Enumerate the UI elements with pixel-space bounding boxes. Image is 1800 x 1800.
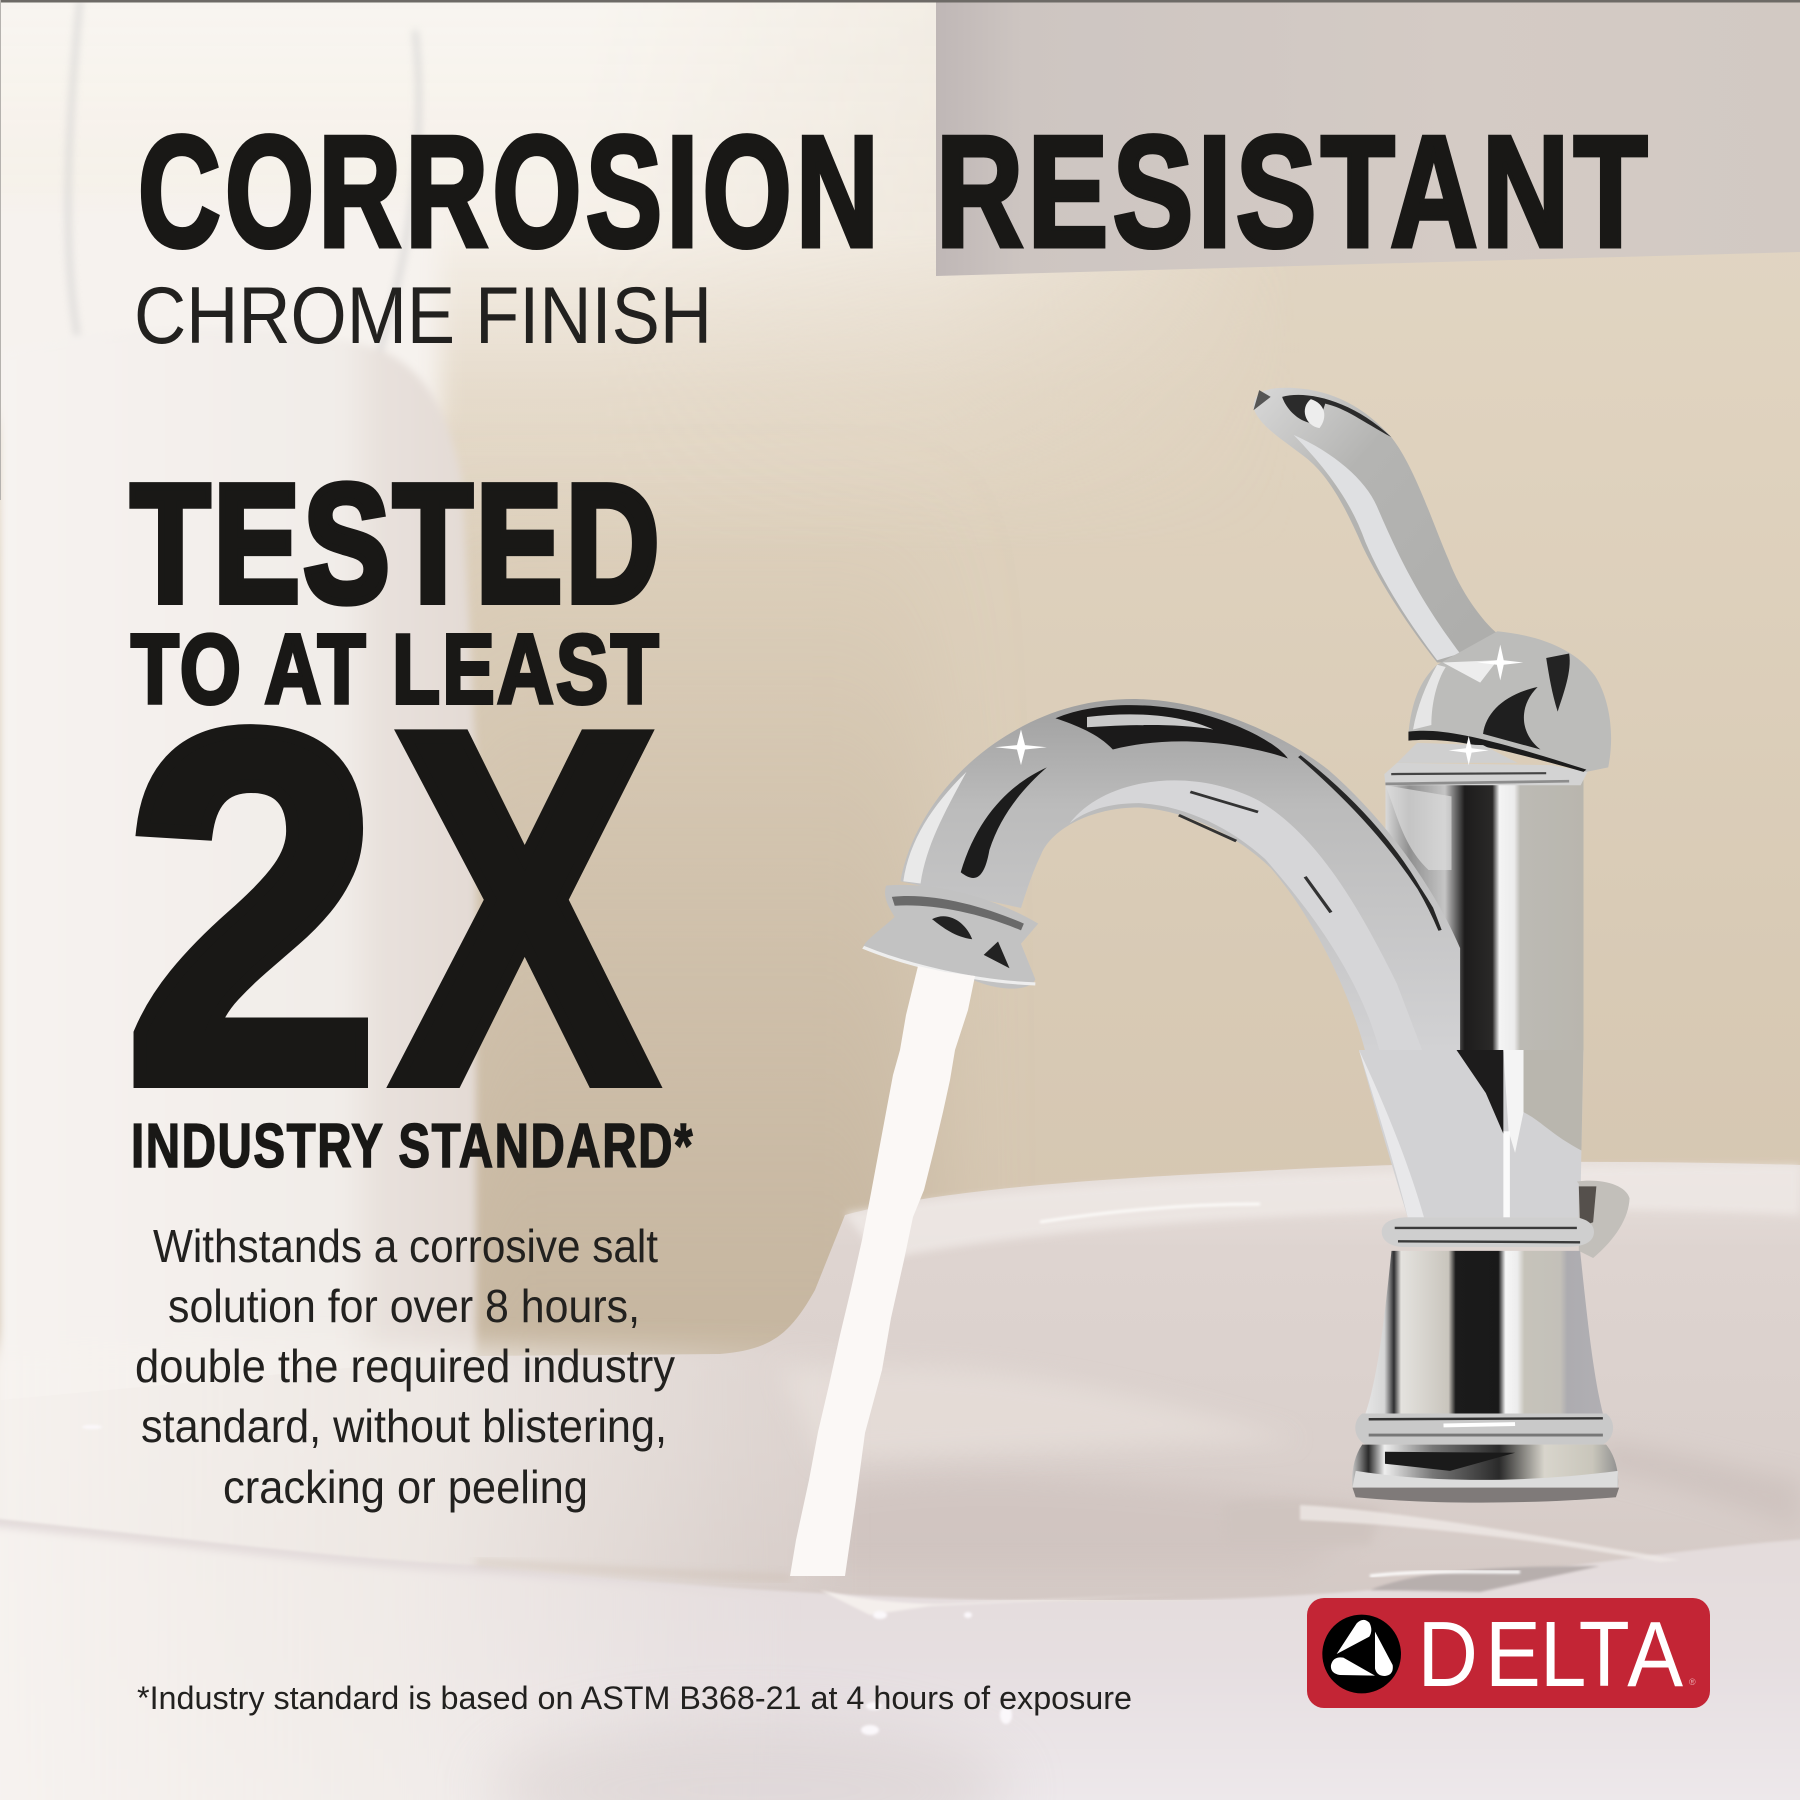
faucet cone base [1365, 1251, 1603, 1414]
industry standard: INDUSTRY STANDARD* [131, 1112, 694, 1181]
basin front lip [0, 1517, 1800, 1800]
front lip soft shadow [490, 1720, 1010, 1800]
faucet post [1385, 774, 1584, 1052]
word: corrosion: CORROSION [138, 104, 883, 280]
body text paragraph: standard, without blistering, [141, 1400, 667, 1452]
title: corrosion resistant [138, 104, 1652, 280]
faucet: lower part with body, collar and base [1352, 1050, 1630, 1503]
logo: Delta badge [1307, 1598, 1710, 1708]
faucet spout [900, 699, 1460, 1052]
faucet handle knob [1397, 631, 1611, 772]
water stream [790, 966, 975, 1576]
droplets [82, 1425, 1012, 1735]
2x: X [393, 628, 658, 1188]
frame line [0, 0, 1800, 2]
towel [0, 328, 476, 1420]
basin shadow streaks [780, 1365, 1300, 1460]
towel ring [68, 0, 419, 375]
headline stat block [124, 451, 694, 1188]
basin left whitening [0, 1345, 860, 1605]
body text paragraph: Withstands a corrosive salt [153, 1220, 658, 1272]
to at least: TO AT LEAST [131, 614, 661, 724]
faucet lift rod [1577, 1181, 1630, 1258]
faucet collar ring [1382, 1217, 1594, 1247]
water reflections [820, 1500, 1680, 1615]
basin rim highlight [845, 1165, 1800, 1260]
2x: 2 [124, 628, 380, 1188]
body text paragraph: double the required industry [135, 1340, 675, 1392]
faucet body [1359, 1050, 1583, 1217]
faucet aerator [863, 885, 1038, 989]
basin [0, 1162, 1800, 1600]
faucet sparkles [995, 645, 1523, 765]
subtitle: chrome finish: CHROME FINISH [134, 271, 712, 361]
faucet: upper part with handle and spout [863, 388, 1611, 1052]
footnote: *Industry standard is based on ASTM B368-21 at 4 hours of exposure [137, 1680, 1132, 1716]
body text paragraph: cracking or peeling [223, 1461, 588, 1513]
body text paragraph [135, 1220, 675, 1513]
wall: darker section left of faucet [430, 480, 930, 1440]
faucet foot [1352, 1445, 1619, 1503]
faucet handle lever [1253, 388, 1497, 662]
faucet collar [1384, 763, 1588, 785]
wall: whitening above towel [0, 200, 440, 420]
2x [124, 628, 658, 1188]
registered mark: ® [1689, 1677, 1696, 1687]
front lip left whitening [0, 1525, 800, 1800]
body text paragraph: solution for over 8 hours, [168, 1280, 640, 1332]
wordmark: DELTA [1418, 1602, 1683, 1706]
tested: TESTED [131, 451, 663, 637]
faucet base rings [1355, 1414, 1613, 1445]
mirror [936, 0, 1800, 276]
icon: Delta triangle mark [1322, 1615, 1401, 1693]
wall: bright upper left glow [1, 2, 1169, 454]
